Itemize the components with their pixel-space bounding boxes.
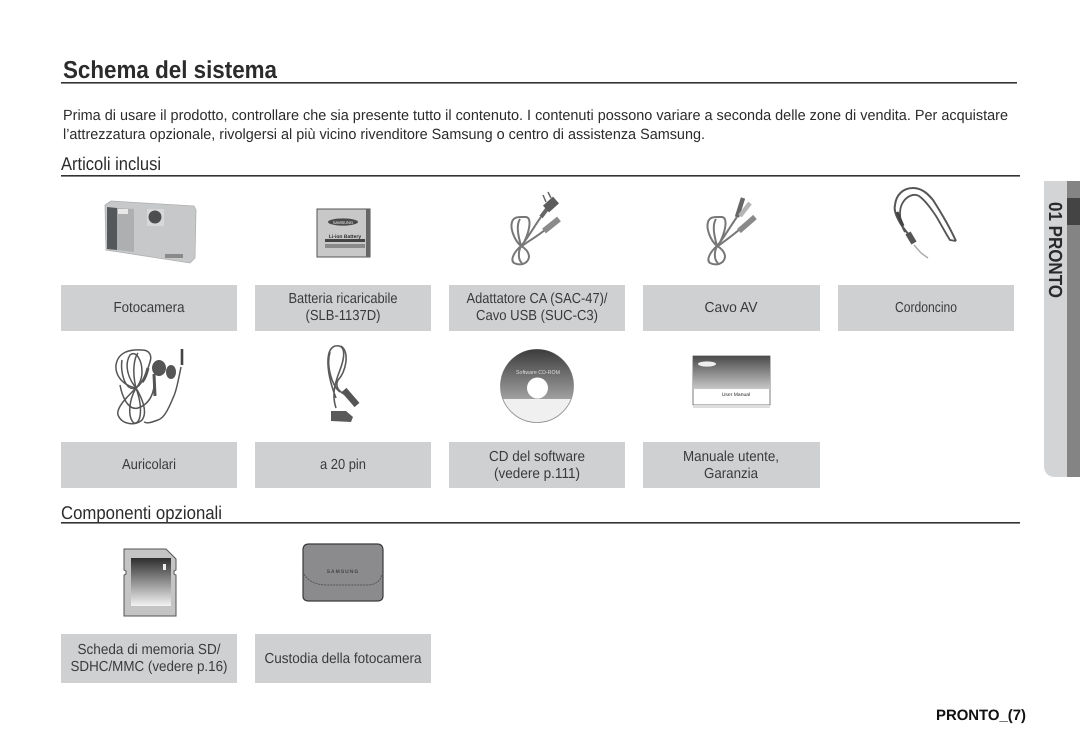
label: Batteria ricaricabile: (SLB-1137D) bbox=[306, 308, 380, 324]
label: Manuale utente: Garanzia bbox=[704, 466, 759, 482]
icon: battery: Li-ion Battery bbox=[329, 234, 361, 240]
label: Adattatore CA / Cavo USB: Cavo USB (SUC-C3) bbox=[476, 308, 598, 324]
label: CD del software: CD del software bbox=[489, 449, 585, 465]
icon: USB cable and AC adapter bbox=[511, 192, 559, 264]
intro paragraph: l’attrezzatura opzionale, rivolgersi al più vicino rivenditore Samsung o centro di assistenza Samsung. bbox=[63, 127, 705, 143]
intro paragraph bbox=[63, 108, 1008, 143]
icon: camera bbox=[105, 201, 196, 263]
label: Manuale utente: Manuale utente, bbox=[683, 449, 779, 465]
icon: user manual: User Manual bbox=[722, 392, 750, 398]
label: a 20 pin bbox=[255, 442, 431, 488]
icon: SD card bbox=[124, 549, 176, 616]
label: Auricolari: Auricolari bbox=[122, 457, 176, 473]
label: Auricolari bbox=[61, 442, 237, 488]
icon: AV cable bbox=[707, 198, 755, 264]
icon: strap bbox=[895, 188, 956, 258]
label: CD del software bbox=[449, 442, 625, 488]
icon: camera case bbox=[303, 544, 383, 601]
label: Adattatore CA / Cavo USB: Adattatore CA (SAC-47)/ bbox=[466, 291, 608, 307]
label: Cordoncino: Cordoncino bbox=[895, 300, 957, 316]
label: Manuale utente bbox=[643, 442, 820, 488]
heading: Componenti opzionali: Componenti opzionali bbox=[61, 502, 222, 523]
side tab: 01 PRONTO bbox=[1044, 181, 1080, 477]
label: Custodia della fotocamera: Custodia della fotocamera bbox=[264, 651, 422, 667]
icon: CD: Software CD-ROM bbox=[516, 370, 560, 376]
label: Cavo AV bbox=[643, 285, 820, 331]
icon: 20 pin cable bbox=[328, 346, 357, 422]
label: Cavo AV: Cavo AV bbox=[704, 300, 758, 316]
icon: user manual bbox=[693, 356, 770, 408]
label: Fotocamera bbox=[61, 285, 237, 331]
title: Schema del sistema bbox=[63, 57, 277, 84]
page number: PRONTO_(7) bbox=[936, 707, 1026, 724]
icon: battery: SAMSUNG bbox=[333, 220, 353, 225]
icon: camera case: SAMSUNG bbox=[327, 569, 359, 575]
label: Fotocamera: Fotocamera bbox=[114, 300, 185, 316]
icon: CD bbox=[500, 349, 574, 422]
label: Cordoncino bbox=[838, 285, 1014, 331]
label: Batteria ricaricabile: Batteria ricaricabile bbox=[288, 291, 398, 307]
label: Batteria ricaricabile bbox=[255, 285, 431, 331]
label: Scheda di memoria bbox=[61, 634, 237, 683]
label: a 20 pin: a 20 pin bbox=[320, 457, 366, 473]
heading: Articoli inclusi: Articoli inclusi bbox=[61, 153, 161, 174]
side tab: 01 PRONTO: 01 PRONTO bbox=[1044, 202, 1065, 298]
label: Custodia della fotocamera bbox=[255, 634, 431, 683]
label: CD del software: (vedere p.111) bbox=[494, 466, 580, 482]
label: Scheda di memoria: SDHC/MMC (vedere p.16) bbox=[70, 659, 228, 675]
intro paragraph: Prima di usare il prodotto, controllare che sia presente tutto il contenuto. I contenuti possono variare a seconda delle zone di vendita. Per acquistare bbox=[63, 108, 1008, 124]
icon: earphones bbox=[116, 349, 182, 424]
label: Adattatore CA / Cavo USB bbox=[449, 285, 625, 331]
label: Scheda di memoria: Scheda di memoria SD/ bbox=[78, 642, 221, 658]
icon: battery bbox=[317, 209, 370, 257]
